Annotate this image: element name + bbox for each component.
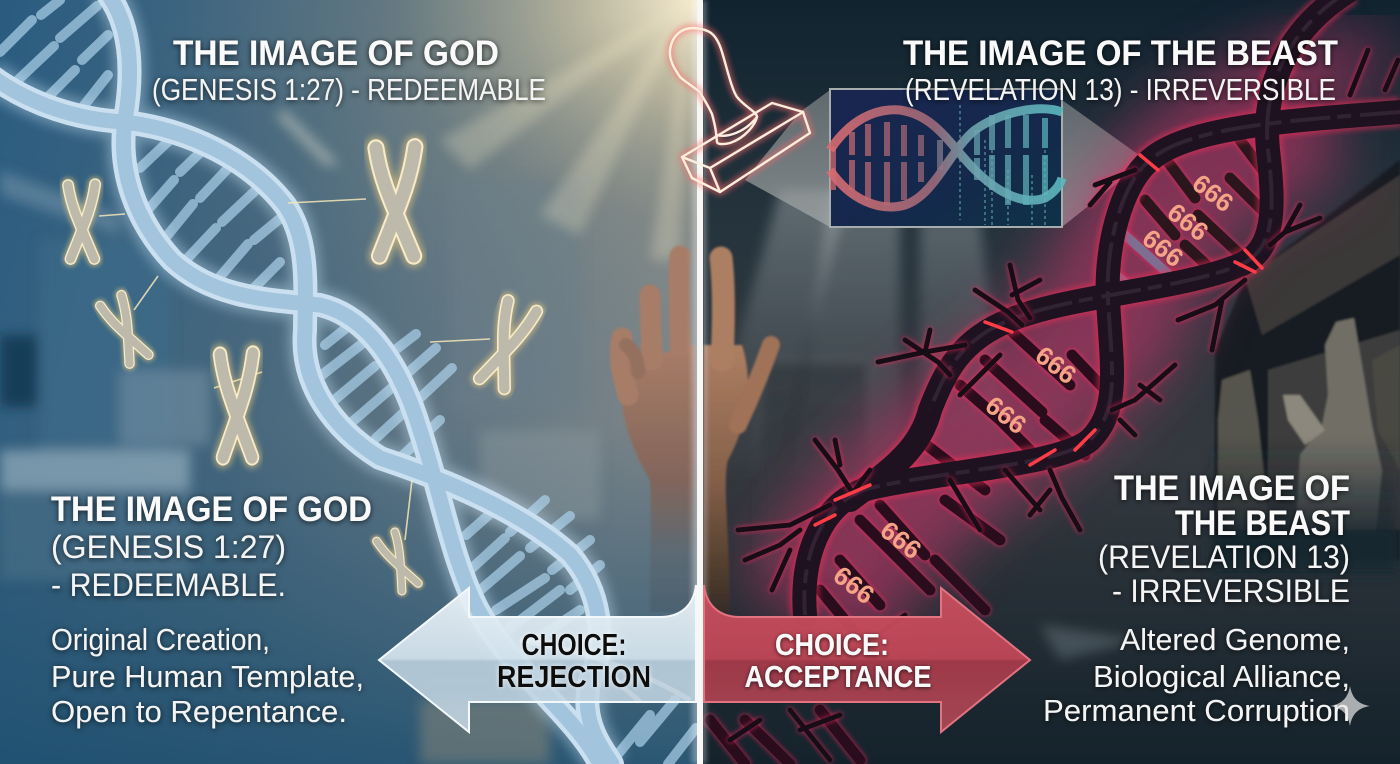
strand glow <box>804 0 1400 615</box>
666 labels: 666 <box>980 390 1032 440</box>
text block: right heading: - IRREVERSIBLE <box>1112 573 1350 609</box>
arrow: choice rejection <box>379 585 696 732</box>
666 labels <box>828 168 1239 610</box>
hand: acceptance <box>704 258 771 612</box>
title: image of the beast <box>903 34 1338 107</box>
text block: left description: Open to Repentance. <box>51 694 347 729</box>
text block: left heading: THE IMAGE OF GOD <box>51 490 372 529</box>
666 labels: 666 <box>1137 223 1189 273</box>
inset: digital DNA <box>830 89 1062 227</box>
text block: right description: Altered Genome, <box>1120 622 1350 657</box>
666 labels: 666 <box>875 515 927 565</box>
text block: left heading: - REDEEMABLE. <box>51 567 286 603</box>
title: image of god: (GENESIS 1:27) - REDEEMABLE <box>152 72 546 107</box>
666 labels: 666 <box>828 560 880 610</box>
relief wall <box>1215 160 1400 560</box>
text block: right heading: (REVELATION 13) <box>1098 539 1350 575</box>
icon: sparkle <box>1330 686 1370 726</box>
text block: left heading <box>51 490 372 603</box>
title: image of the beast: THE IMAGE OF THE BEAST <box>903 34 1338 73</box>
title: image of god <box>152 34 546 107</box>
DNA rungs <box>0 0 696 764</box>
666 labels: 666 <box>1030 340 1082 390</box>
text block: left description: Original Creation, <box>51 622 270 657</box>
arrow: choice acceptance <box>704 585 1030 732</box>
icon: chromosomes <box>68 147 537 592</box>
inset wedge <box>745 90 1146 227</box>
text block: left description <box>51 622 364 729</box>
icon: raised hands <box>620 256 771 612</box>
hot cracks <box>815 155 1262 525</box>
center divider <box>692 0 706 764</box>
text block: right heading: THE IMAGE OF <box>1114 469 1350 508</box>
connector lines <box>99 199 490 540</box>
text block: right description <box>1043 622 1350 728</box>
title: image of god: THE IMAGE OF GOD <box>173 34 499 73</box>
arrow: choice acceptance: ACCEPTANCE <box>744 659 932 694</box>
panel: pure DNA double helix <box>0 0 696 764</box>
strand bodies <box>804 0 1400 615</box>
text block: right heading: THE BEAST <box>1175 504 1350 543</box>
icon: neon stamp <box>670 28 810 192</box>
666 labels: 666 <box>1187 168 1239 218</box>
arrow: choice rejection: REJECTION <box>497 659 651 694</box>
strand bodies <box>0 0 612 764</box>
666 labels: 666 <box>1162 197 1214 247</box>
pink glow <box>810 110 1330 620</box>
arrow: choice rejection: CHOICE: <box>522 627 626 662</box>
text block: left heading: (GENESIS 1:27) <box>51 529 286 565</box>
thorns <box>730 50 1398 760</box>
dark rungs <box>710 140 1270 764</box>
strand glow <box>0 0 612 764</box>
text block: right description: Biological Alliance, <box>1093 659 1350 694</box>
arrow: choice acceptance: CHOICE: <box>775 627 889 662</box>
hand: rejection <box>620 256 695 612</box>
text block: right description: Permanent Corruption <box>1043 693 1350 728</box>
panel: corrupted thorn DNA <box>710 0 1400 764</box>
text block: left description: Pure Human Template, <box>51 659 364 694</box>
text block: right heading <box>1098 469 1350 609</box>
panel: left laboratory background <box>0 0 700 764</box>
panel: right temple background <box>700 0 1400 764</box>
